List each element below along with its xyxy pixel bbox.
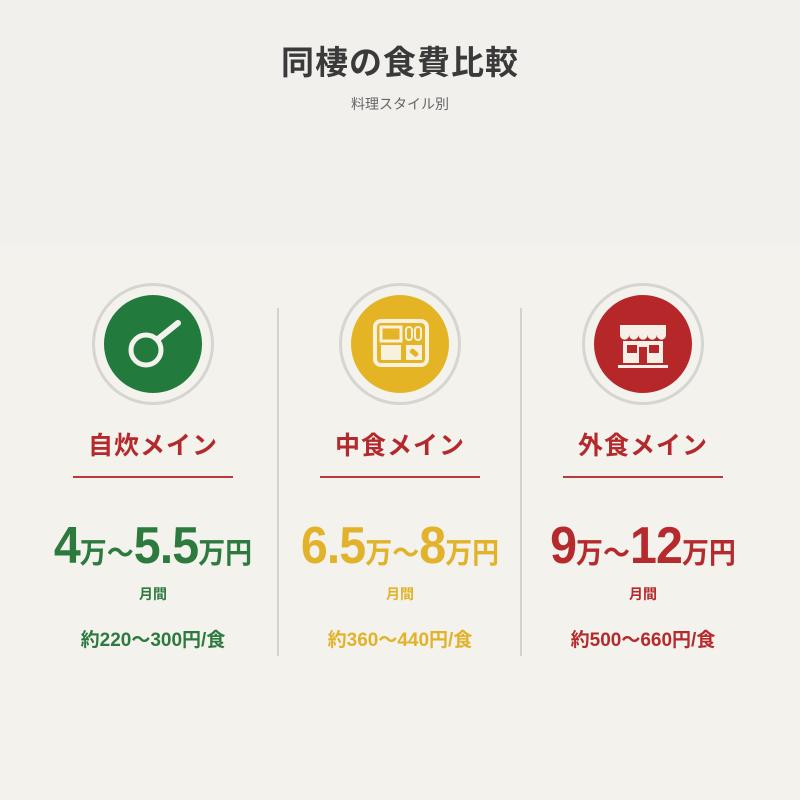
monthly price: 6.5万～8万円 bbox=[301, 517, 499, 575]
heading: 自炊メイン bbox=[88, 432, 218, 460]
title: 同棲の食費比較 bbox=[281, 44, 519, 81]
icon: store bbox=[594, 295, 692, 393]
icon: frying pan bbox=[104, 295, 202, 393]
monthly price: 9万～12万円 bbox=[550, 517, 736, 575]
per meal: 約220～300円/食 bbox=[81, 630, 225, 651]
panel: 自炊メイン bbox=[54, 283, 252, 651]
subtitle: 料理スタイル別 bbox=[351, 96, 449, 112]
text: 月間 bbox=[629, 586, 657, 602]
per meal: 約360～440円/食 bbox=[328, 630, 472, 651]
text: 月間 bbox=[386, 586, 414, 602]
monthly price: 4万～5.5万円 bbox=[54, 517, 252, 575]
text: 月間 bbox=[139, 586, 167, 602]
per meal: 約500～660円/食 bbox=[571, 630, 715, 651]
heading: 中食メイン bbox=[335, 432, 465, 460]
panel: 外食メイン bbox=[550, 283, 736, 651]
heading: 外食メイン bbox=[578, 432, 708, 460]
icon: bento bbox=[351, 295, 449, 393]
panel: 中食メイン bbox=[301, 283, 499, 651]
